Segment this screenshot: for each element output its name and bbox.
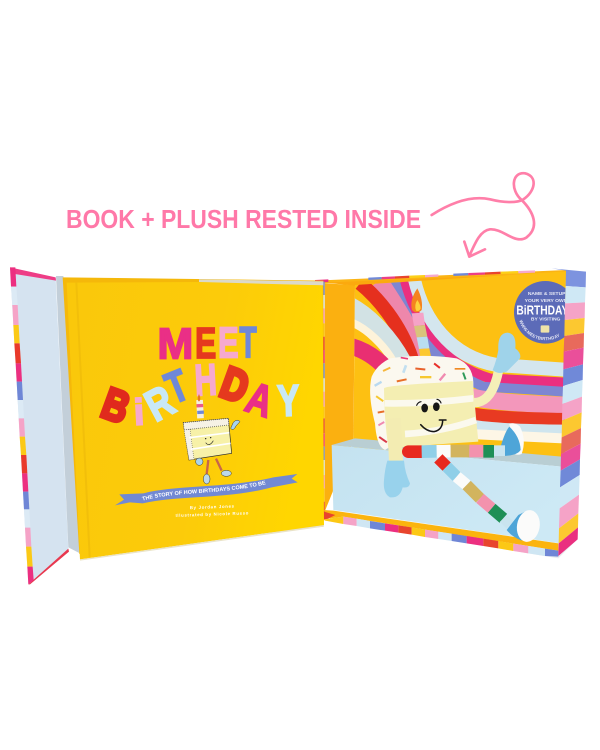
flap: inside of the box lid (10, 267, 69, 584)
panel: open box with plush (315, 268, 586, 558)
arrow: looping pink arrow (432, 173, 534, 257)
plush: cake front (384, 381, 478, 448)
book title: BIRTHDAY: T (159, 361, 196, 414)
plush: raised arm and mitten (473, 333, 520, 403)
book title: BIRTHDAY: H (193, 355, 218, 406)
plush: cake back and frosting (370, 356, 473, 450)
banner: book subtitle ribbon (115, 474, 298, 506)
box interior: side wall and top lip (315, 270, 567, 520)
book: page block and back cover (56, 276, 323, 554)
plush: face (417, 399, 446, 432)
plush: candle (411, 288, 432, 360)
book title: MEET: T (239, 318, 257, 367)
author credits: Illustrated by Nicole Russo (175, 510, 249, 518)
right wall stripes (552, 268, 586, 556)
book title: BIRTHDAY (95, 355, 300, 433)
bottom edge stripes (323, 510, 558, 557)
banner: book subtitle ribbon: THE STORY OF HOW BIRTHDAYS COME TO BE (142, 480, 266, 500)
badge: name and setup sticker (514, 281, 566, 344)
book title: BIRTHDAY: Y (277, 376, 300, 426)
book title: BIRTHDAY: D (214, 358, 255, 413)
badge: name and setup sticker: YOUR VERY OWN (525, 298, 568, 304)
infographic scene (10, 172, 586, 584)
top edge stripes (315, 270, 535, 283)
author credits (175, 504, 249, 518)
book title: BIRTHDAY: i (133, 391, 145, 433)
box floor rim (323, 513, 577, 558)
plush: back leg and shoe (408, 423, 524, 456)
book title: BIRTHDAY: A (240, 373, 279, 427)
badge: name and setup sticker: NAME & SETUP (528, 291, 566, 297)
book title: MEET (157, 318, 257, 368)
plush: front leg and shoe (438, 458, 542, 544)
badge: name and setup sticker: BiRTHDAY (516, 303, 569, 317)
illustration: cake slice character (183, 394, 240, 484)
book title: MEET: E (218, 319, 239, 368)
badge: name and setup sticker: WWW.MEETBIRTHDAY (520, 320, 559, 340)
back wall: rainbow (354, 272, 566, 457)
left wall edge stripes (320, 282, 325, 520)
foam block (332, 438, 562, 543)
book title: BIRTHDAY: R (137, 376, 183, 431)
plush: lower arm and mitten (384, 418, 410, 497)
badge: name and setup sticker: BY VISITING (531, 317, 561, 323)
panel: open book side (10, 267, 324, 584)
author credits: By Jordan Jones (190, 504, 235, 510)
book title: BIRTHDAY: B (95, 379, 136, 433)
book title: MEET: E (195, 319, 216, 368)
book: front cover (67, 282, 324, 561)
heading: BOOK + PLUSH RESTED INSIDE (66, 206, 421, 234)
book title: MEET: M (157, 319, 193, 368)
